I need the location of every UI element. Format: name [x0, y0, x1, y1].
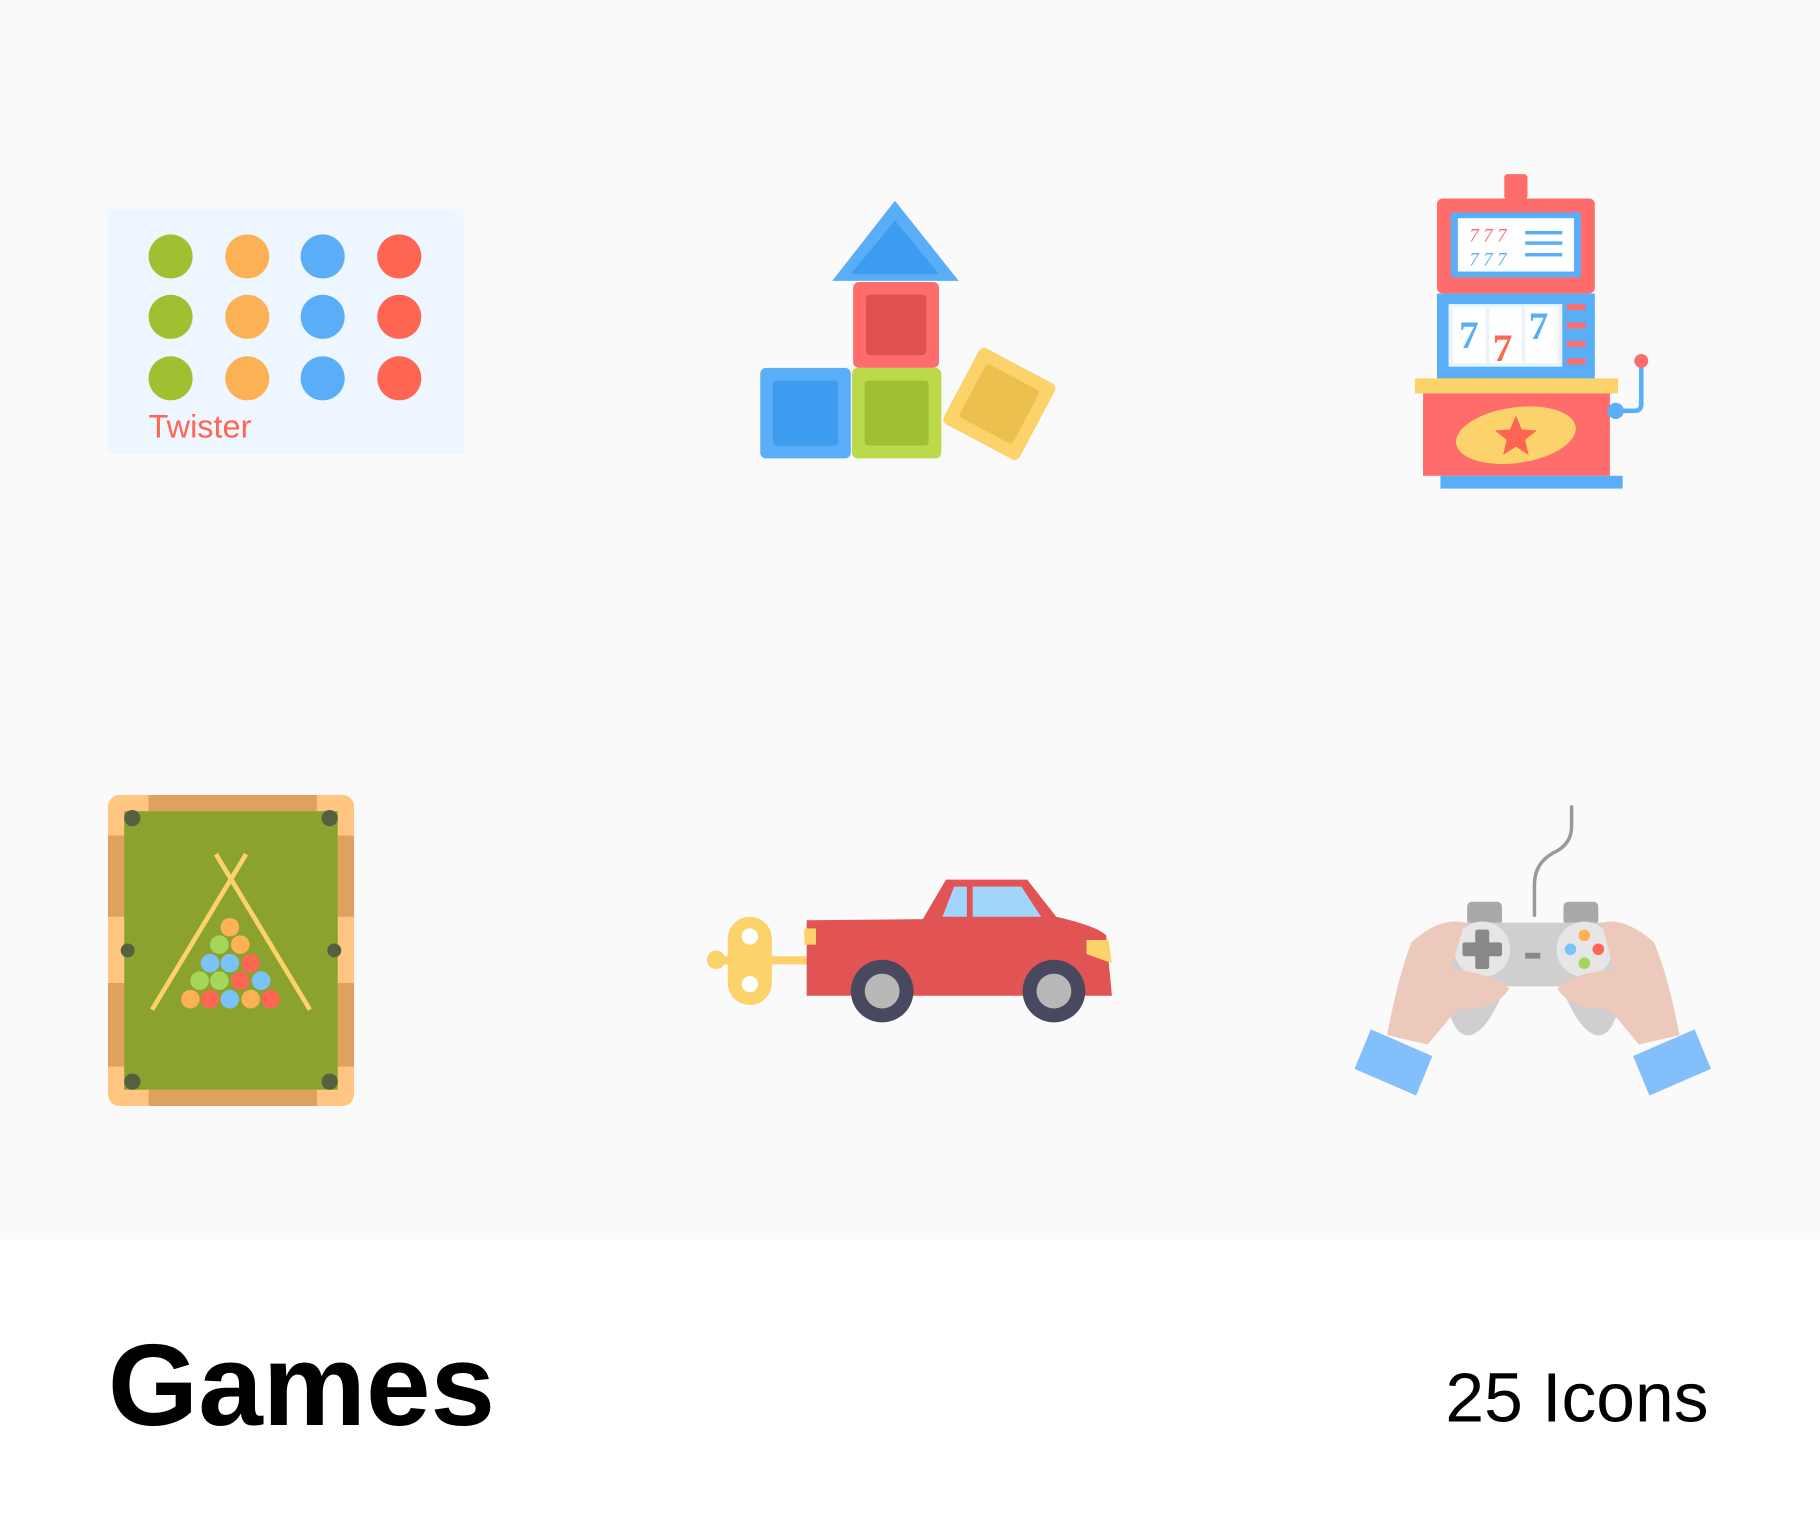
icon: gamepad with hands [1355, 805, 1711, 1096]
icon: toy blocks [760, 201, 1057, 462]
icon: twister: Twister [149, 409, 252, 445]
icon: slot machine: 7 [1529, 304, 1548, 348]
icon: slot machine [1415, 174, 1648, 489]
icon: slot machine: 7 7 7 [1469, 250, 1507, 271]
icon count: 25 Icons [1445, 1359, 1709, 1437]
icon: slot machine: 7 7 7 [1469, 225, 1507, 246]
icon: slot machine: 7 [1493, 326, 1512, 370]
icon: wind-up car [707, 880, 1112, 1022]
icon: twister [108, 209, 463, 454]
icon: slot machine: 7 [1459, 313, 1479, 357]
icon: pool table [108, 795, 354, 1106]
title: Games [108, 1320, 495, 1450]
